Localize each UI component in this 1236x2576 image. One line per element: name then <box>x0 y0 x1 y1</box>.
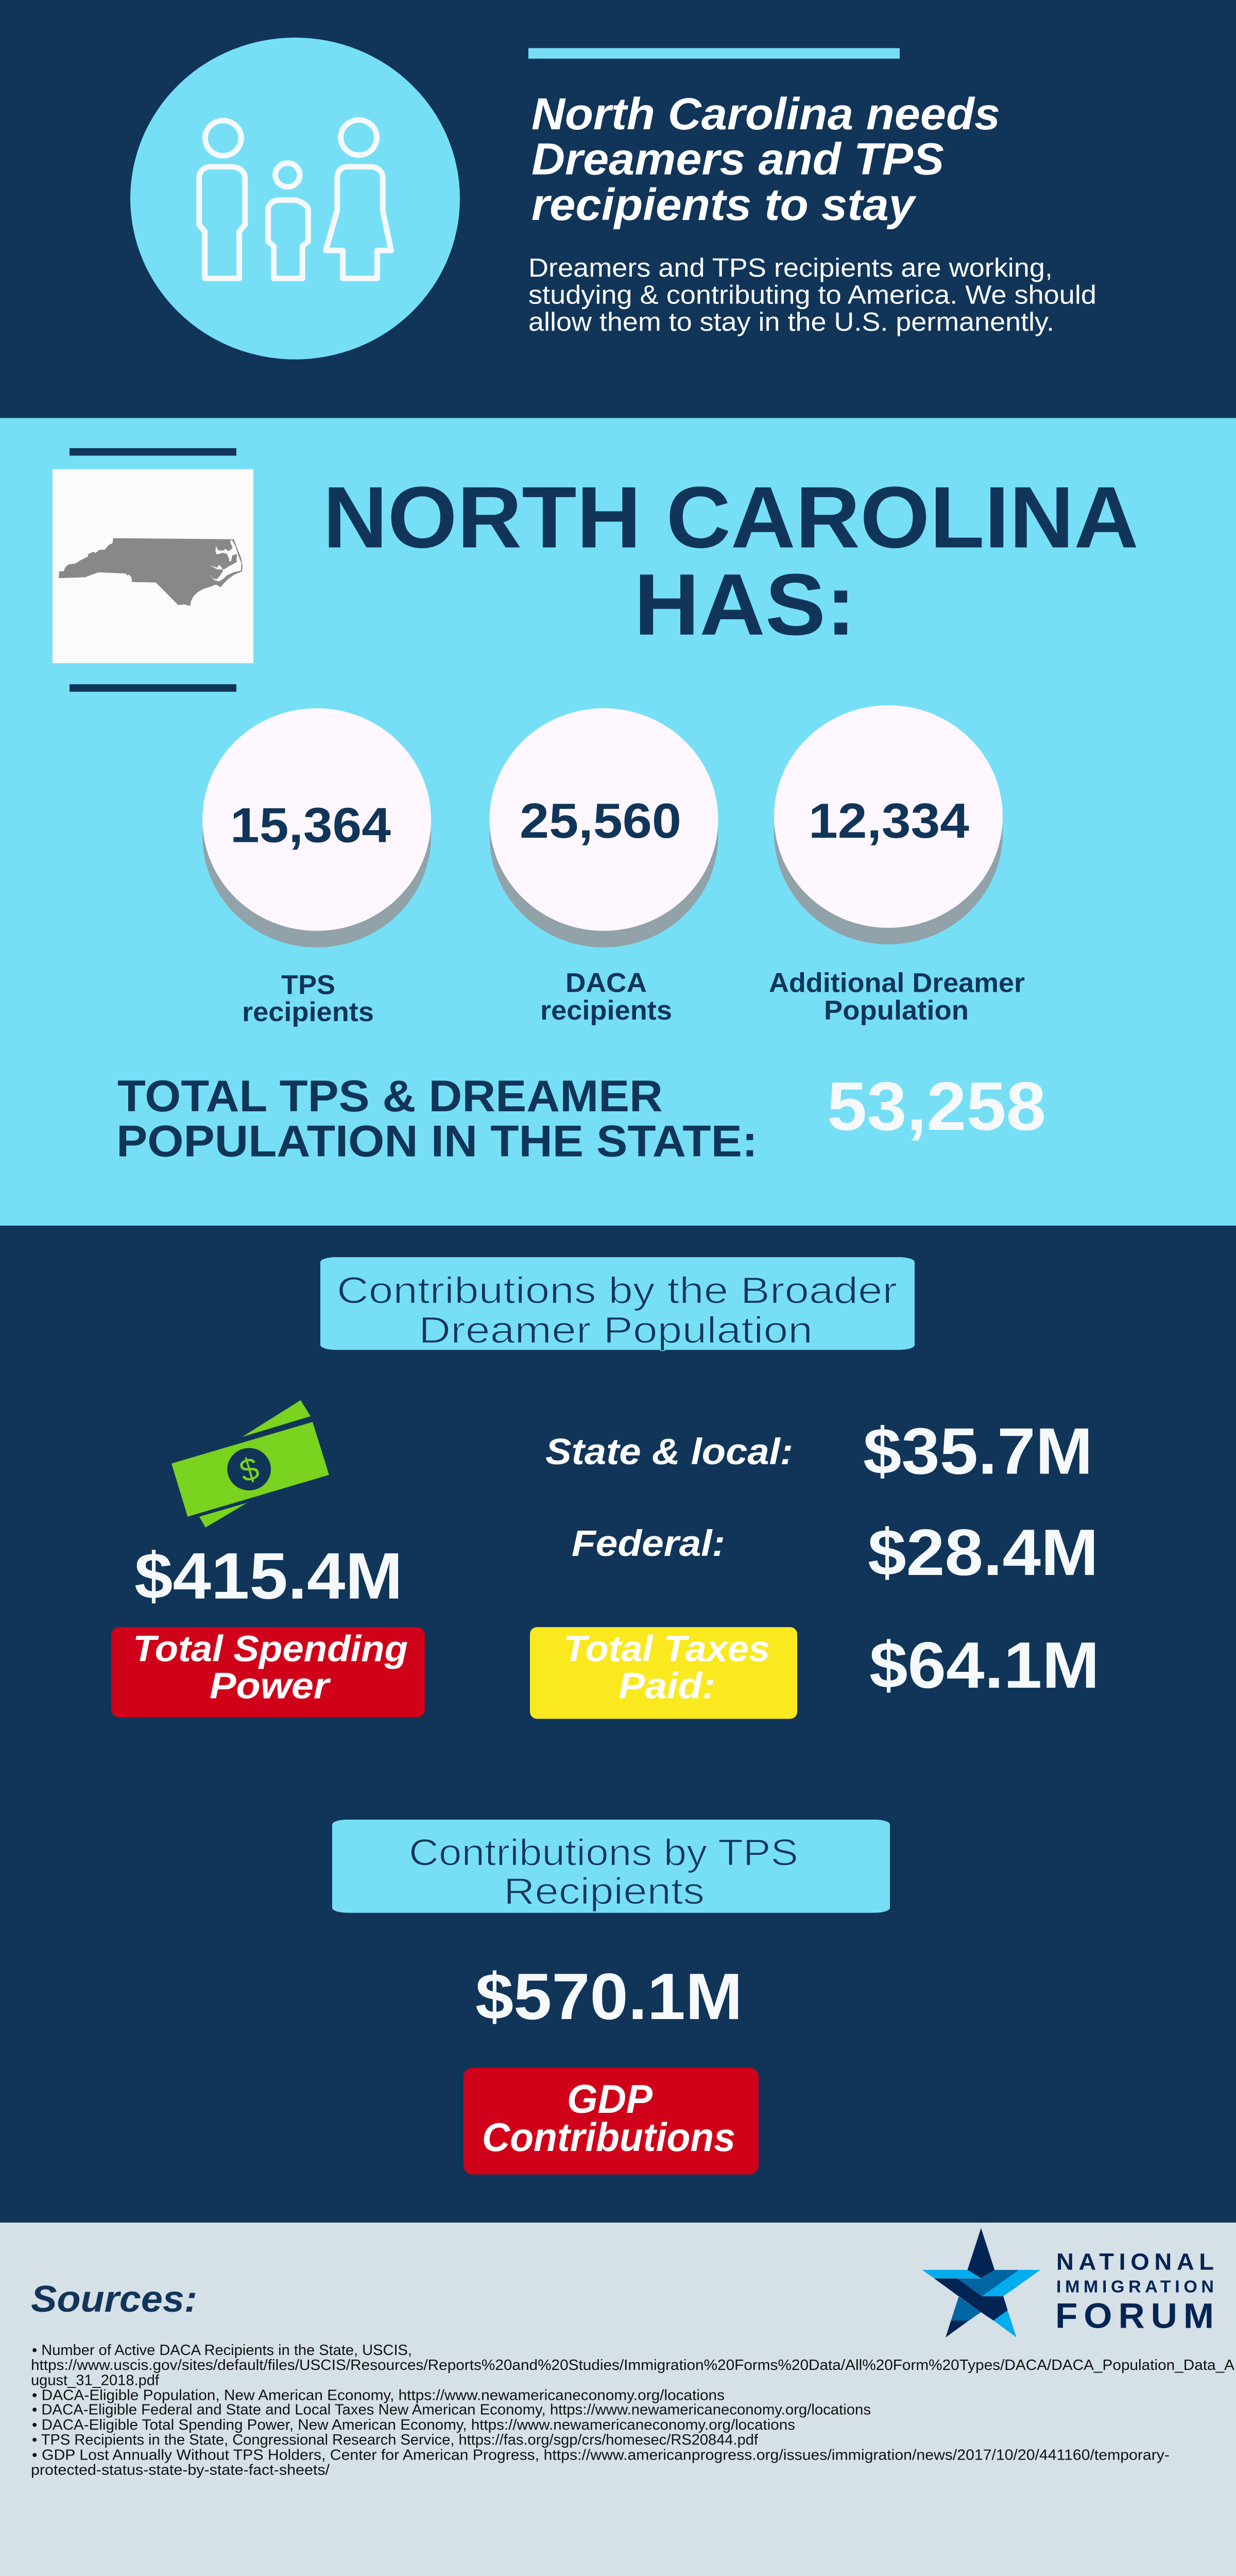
title: recipients to stay <box>531 179 917 230</box>
stat: total taxes: Total Taxes <box>563 1629 770 1669</box>
heading: broader Dreamer population: Dreamer Population <box>419 1310 813 1351</box>
stat: spending power <box>111 1539 425 1717</box>
stat: total taxes: Paid: <box>619 1666 715 1706</box>
heading: HAS: <box>634 556 856 653</box>
stat: DACA recipients: recipients <box>540 996 672 1026</box>
total number: 53,258 <box>827 1068 1046 1145</box>
source list: ugust_31_2018.pdf <box>31 2372 159 2388</box>
panel: header <box>0 0 1236 418</box>
panel: contributions <box>0 1226 1236 2223</box>
stat: DACA recipients: 25,560 <box>520 793 681 849</box>
total label: TOTAL TPS & DREAMER <box>117 1071 663 1121</box>
intro text: studying & contributing to America. We should <box>528 280 1096 309</box>
logo: National Immigration Forum: IMMIGRATION <box>1056 2278 1214 2296</box>
source list <box>31 2342 1235 2478</box>
stat: state and local taxes: $35.7M <box>863 1415 1093 1488</box>
stat: additional Dreamer population: Additional Dreamer <box>769 968 1025 998</box>
stat: federal taxes: Federal: <box>572 1523 725 1564</box>
source list: protected-status-state-by-state-fact-sheets/ <box>31 2462 330 2478</box>
icon: family in circle <box>130 38 460 360</box>
panel: sources <box>0 2223 1236 2576</box>
stat: state and local taxes <box>545 1415 1093 1488</box>
logo: National Immigration Forum <box>922 2228 1214 2337</box>
heading: NORTH CAROLINA <box>323 469 1139 566</box>
stat: TPS recipients: TPS <box>281 970 335 1000</box>
stat: additional Dreamer population <box>769 705 1025 1026</box>
stat: spending power: $415.4M <box>134 1539 403 1613</box>
stat: total taxes <box>530 1627 1100 1719</box>
stat: additional Dreamer population: Population <box>824 996 969 1026</box>
logo: National Immigration Forum: FORUM <box>1055 2296 1214 2335</box>
map card <box>53 448 253 692</box>
logo: National Immigration Forum: NATIONAL <box>1056 2248 1214 2275</box>
stat: TPS recipients: recipients <box>242 997 374 1027</box>
stat: state and local taxes: State & local: <box>545 1432 793 1472</box>
title: North Carolina needs <box>531 89 1000 139</box>
stat: federal taxes: $28.4M <box>868 1516 1098 1589</box>
icon: money: $ <box>235 1450 263 1489</box>
stat: TPS recipients: 15,364 <box>230 798 391 853</box>
title: Dreamers and TPS <box>531 134 944 184</box>
accent bar <box>528 48 900 59</box>
source list: • GDP Lost Annually Without TPS Holders, Center for American Progress, https://www.americanprogress.org/issues/immigration/news/2017/10/20/441160/temporary- <box>32 2447 1170 2463</box>
intro text: allow them to stay in the U.S. permanently. <box>528 308 1054 336</box>
stat: federal taxes <box>572 1516 1098 1589</box>
heading: broader Dreamer population <box>320 1257 915 1351</box>
stat: GDP: Contributions <box>482 2115 735 2160</box>
source list: • DACA-Eligible Population, New American Economy, https://www.newamericaneconomy.org/locations <box>32 2387 725 2403</box>
sources heading: Sources: <box>31 2279 197 2320</box>
heading <box>323 469 1139 653</box>
heading: TPS recipients: Contributions by TPS <box>409 1832 798 1873</box>
total label: POPULATION IN THE STATE: <box>116 1116 758 1166</box>
stat: DACA recipients: DACA <box>565 968 647 998</box>
source list: • DACA-Eligible Federal and State and Local Taxes New American Economy, https://www.newamericaneconomy.org/locations <box>32 2402 871 2418</box>
source list: • TPS Recipients in the State, Congressional Research Service, https://fas.org/sgp/crs/homesec/RS20844.pdf <box>32 2432 758 2448</box>
source list: https://www.uscis.gov/sites/default/files/USCIS/Resources/Reports%20and%20Studies/Immigration%20Forms%20Data/All%20Form%20Types/DACA/DACA_Population_Data_A <box>31 2357 1235 2374</box>
stat: spending power: Total Spending <box>133 1629 408 1669</box>
source list: • Number of Active DACA Recipients in the State, USCIS, <box>32 2342 412 2359</box>
panel: North Carolina population <box>0 418 1236 1226</box>
stat: TPS recipients <box>202 708 431 1027</box>
stat: GDP: GDP <box>567 2077 653 2122</box>
source list: • DACA-Eligible Total Spending Power, New American Economy, https://www.newamericaneconomy.org/locations <box>32 2417 795 2433</box>
stat: GDP <box>464 1960 759 2175</box>
stat: additional Dreamer population: 12,334 <box>809 793 969 849</box>
total label <box>116 1071 758 1166</box>
heading: broader Dreamer population: Contributions by the Broader <box>337 1270 897 1311</box>
stat: spending power: Power <box>210 1666 331 1706</box>
heading: TPS recipients: Recipients <box>504 1871 705 1912</box>
intro text: Dreamers and TPS recipients are working, <box>528 253 1053 282</box>
stat: GDP: $570.1M <box>475 1960 743 2033</box>
title <box>531 89 1000 230</box>
icon: money <box>171 1400 329 1528</box>
heading: TPS recipients <box>332 1820 890 1913</box>
stat: total taxes: $64.1M <box>869 1629 1100 1702</box>
intro text <box>528 253 1096 336</box>
stat: DACA recipients <box>489 708 718 1026</box>
